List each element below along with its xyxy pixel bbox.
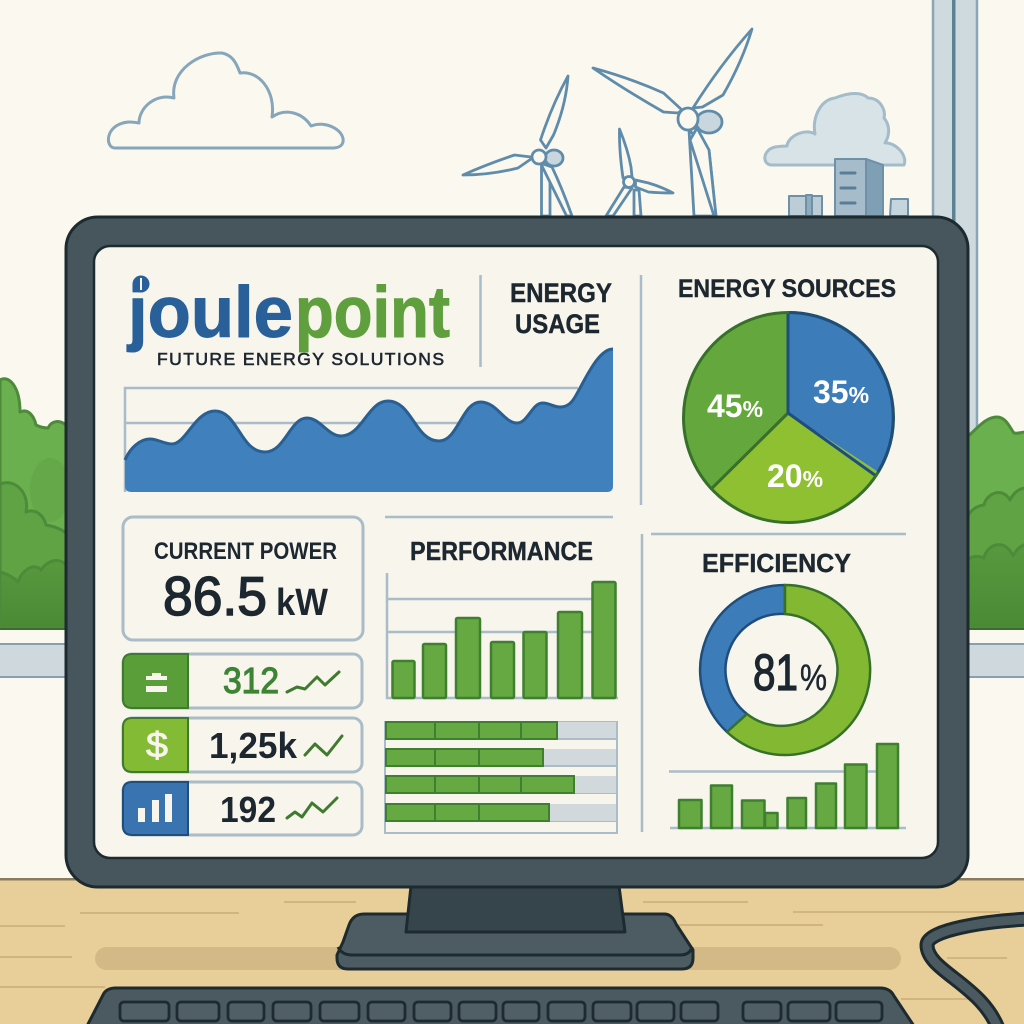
turbine large — [593, 29, 752, 216]
panel: current power — [123, 517, 363, 640]
heading: performance: PERFORMANCE — [410, 536, 593, 566]
turbine small — [606, 129, 673, 216]
stat row: 192 — [123, 782, 362, 835]
donut gauge: efficiency: 81 — [753, 644, 798, 701]
donut gauge: efficiency — [700, 585, 870, 755]
window frame — [933, 0, 977, 438]
stat row: 192: 192 — [220, 789, 276, 830]
wind turbines — [463, 29, 752, 216]
pie chart: energy sources: 45% — [707, 388, 763, 424]
desk — [0, 878, 1024, 1024]
screen — [94, 246, 938, 858]
cloud outline left — [108, 53, 343, 148]
panel: current power: kW — [276, 582, 328, 624]
pie chart: energy sources — [682, 311, 895, 524]
panel: current power: CURRENT POWER — [154, 538, 337, 565]
pie chart: energy sources: 20% — [767, 458, 823, 494]
pie chart: energy sources: 35% — [813, 374, 869, 410]
dividers — [385, 275, 906, 832]
stat row: 312 — [123, 654, 362, 708]
heading: efficiency: EFFICIENCY — [702, 548, 851, 578]
monitor bezel — [66, 217, 968, 887]
stat row: 1,25k: 1,25k — [209, 725, 298, 766]
logo: joule — [126, 273, 293, 353]
heading: energy usage: USAGE — [515, 309, 600, 339]
window sill — [0, 628, 1024, 677]
donut gauge: efficiency: % — [800, 657, 827, 698]
city buildings — [789, 159, 908, 216]
stat row: 312: 312 — [223, 660, 279, 701]
logo: point — [295, 273, 450, 353]
turbine left — [463, 76, 572, 216]
keyboard — [87, 988, 914, 1024]
cloud filled right — [765, 94, 905, 165]
logo — [126, 273, 450, 369]
heading: energy sources: ENERGY SOURCES — [678, 275, 896, 303]
heading: energy usage — [510, 278, 612, 339]
bar chart: performance — [387, 573, 618, 698]
horizontal bars: performance — [385, 722, 617, 833]
power cable — [927, 919, 1024, 1024]
stat row: 1,25k: $ — [146, 726, 168, 765]
stat row: 1,25k — [123, 718, 362, 772]
panel: current power: 86.5 — [163, 565, 267, 627]
bar chart: efficiency — [669, 744, 906, 828]
heading: energy usage: ENERGY — [510, 278, 612, 308]
bushes left — [0, 379, 70, 628]
monitor stand — [337, 886, 693, 969]
area chart: energy usage — [125, 349, 613, 492]
bushes right — [966, 417, 1024, 628]
logo: FUTURE ENERGY SOLUTIONS — [157, 349, 444, 369]
